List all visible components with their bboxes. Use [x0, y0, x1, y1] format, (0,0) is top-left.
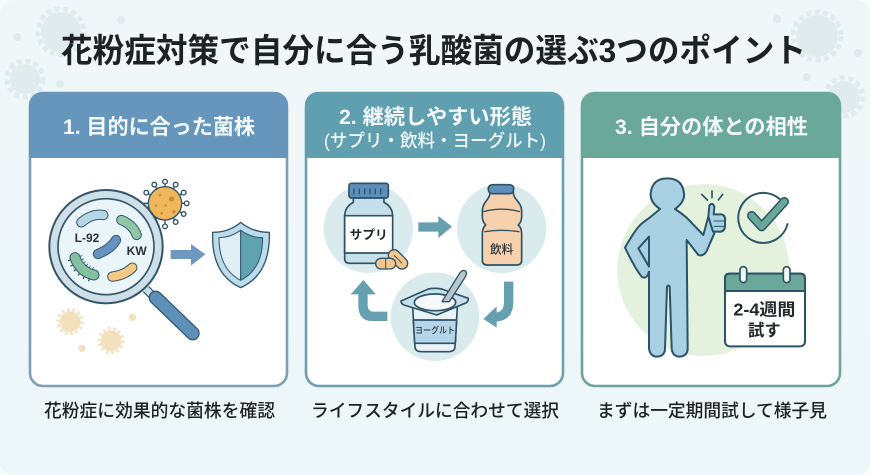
- icon: person thumbs up: [625, 178, 725, 357]
- illustration: person and calendar: [617, 178, 805, 357]
- panel: 2 format: [305, 92, 564, 386]
- panel 3 body: [582, 93, 840, 386]
- caption 3: まずは一定期間試して様子見: [597, 401, 827, 421]
- panel 2 header band: [305, 92, 564, 158]
- panel 1 heading: 1. 目的に合った菌株: [63, 116, 255, 139]
- icon: calendar: [725, 267, 805, 346]
- backdrop circle: [617, 184, 789, 356]
- label: 飲料: 飲料: [490, 243, 514, 257]
- panel 2 subheading: (サプリ・飲料・ヨーグルト): [324, 131, 546, 151]
- panel 3 heading: 3. 自分の体との相性: [615, 116, 808, 139]
- label: サプリ: サプリ: [350, 228, 388, 242]
- arrow: left then up: [351, 280, 387, 321]
- icon: check circle: [738, 193, 788, 243]
- arrow: right: [418, 216, 452, 238]
- illustration: supplement cycle: [324, 183, 546, 361]
- icon: shield: [213, 222, 269, 288]
- caption 1: 花粉症に効果的な菌株を確認: [44, 401, 275, 421]
- arrow: [171, 244, 205, 266]
- icon: magnifier handle: [146, 289, 193, 333]
- panel 1 header band: [29, 92, 288, 158]
- label: KW: KW: [127, 244, 147, 258]
- panel: 1 strain: [29, 92, 288, 386]
- label: ヨーグルト: ヨーグルト: [415, 325, 455, 336]
- panel 2 heading: 2. 継続しやすい形態: [339, 106, 532, 129]
- label: 試す: 試す: [748, 321, 781, 340]
- label: L-92: L-92: [75, 231, 100, 245]
- icon: supplement bottle: [345, 183, 393, 263]
- caption 2: ライフスタイルに合わせて選択: [311, 401, 559, 421]
- icon: virus: [143, 179, 189, 229]
- panel 2 body: [306, 93, 563, 386]
- arrow: down then left: [483, 282, 513, 328]
- icon: sparkle lines: [702, 191, 723, 200]
- background pollen decorations: [7, 9, 863, 116]
- label: 2-4週間: 2-4週間: [733, 299, 795, 319]
- icon: capsules: [376, 247, 410, 271]
- title: 花粉症対策で自分に合う乳酸菌の選ぶ3つのポイント: [61, 32, 806, 69]
- panel 1 body: [30, 93, 287, 386]
- icon: yogurt cup: [401, 270, 468, 352]
- panel 3 header band: [581, 92, 841, 158]
- icon: bacteria: [75, 215, 137, 277]
- illustration: magnifier, bacteria and shield: [49, 179, 269, 353]
- icon: faded pollen: [58, 310, 136, 353]
- icon: magnifier lens: [49, 190, 163, 303]
- icon: drink bottle: [482, 185, 522, 265]
- icon circles: [324, 184, 546, 361]
- panel: 3 compatibility: [581, 92, 841, 386]
